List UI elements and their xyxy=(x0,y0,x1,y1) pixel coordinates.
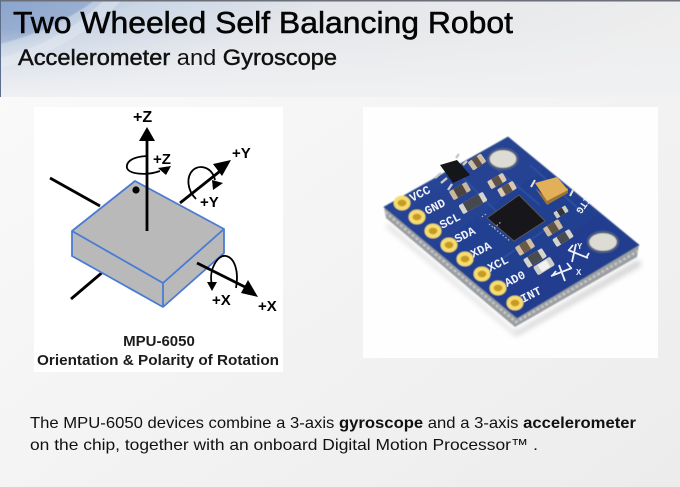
panel: MPU-6050 orientation diagram xyxy=(34,107,283,372)
pin labels xyxy=(407,183,592,307)
Z axis arrow xyxy=(127,109,171,231)
gold pads xyxy=(396,198,521,308)
voltage regulator xyxy=(435,154,470,190)
axis letters xyxy=(576,242,583,277)
axis letters: X xyxy=(576,268,582,277)
board shadow xyxy=(386,224,642,336)
axis letters: Y xyxy=(577,242,583,251)
diagram caption: MPU-6050 xyxy=(123,333,195,350)
pin labels: XCL xyxy=(485,253,511,276)
pin-1 dot xyxy=(132,186,140,194)
pin labels: GND xyxy=(422,196,448,219)
body text: on the chip, together with an onboard Digital Motion Processor™ . xyxy=(30,437,538,454)
Y axis arrow xyxy=(180,145,251,211)
diagram caption: Orientation & Polarity of Rotation xyxy=(37,352,279,369)
main IC xyxy=(480,195,545,241)
X axis arrow: +X xyxy=(212,292,231,309)
rear axis stubs xyxy=(50,178,111,299)
X axis arrow: +X xyxy=(258,298,277,315)
tantalum capacitor xyxy=(531,177,573,205)
header band xyxy=(0,0,680,97)
small components xyxy=(449,153,574,276)
title: Two Wheeled Self Balancing Robot xyxy=(13,5,513,40)
pin labels: XDA xyxy=(468,239,495,262)
subtitle: Accelerometer and Gyroscope xyxy=(18,45,337,70)
panel: MPU-6050 board illustration xyxy=(363,107,658,358)
trace shading xyxy=(455,155,580,260)
body text xyxy=(30,415,636,454)
body text: The MPU-6050 devices combine a 3-axis gyroscope and a 3-axis accelerometer xyxy=(30,415,636,432)
board top xyxy=(384,137,639,318)
diagram caption xyxy=(37,333,279,369)
mounting holes xyxy=(488,149,618,252)
axis silkscreen xyxy=(551,244,589,281)
pin labels: AD0 xyxy=(502,268,528,291)
pin labels: ITG xyxy=(572,194,592,215)
pin labels: VCC xyxy=(407,183,433,206)
board edge xyxy=(384,207,639,327)
pin labels: INT xyxy=(518,284,544,307)
Z axis arrow: +Z xyxy=(133,109,152,126)
Y axis arrow: +Y xyxy=(200,194,219,211)
chip block xyxy=(72,181,224,307)
pin labels: SDA xyxy=(452,224,479,247)
Y axis arrow: +Y xyxy=(232,145,251,162)
pin labels: SCL xyxy=(437,210,463,233)
X axis arrow xyxy=(197,256,277,315)
Z axis arrow: +Z xyxy=(153,151,171,168)
